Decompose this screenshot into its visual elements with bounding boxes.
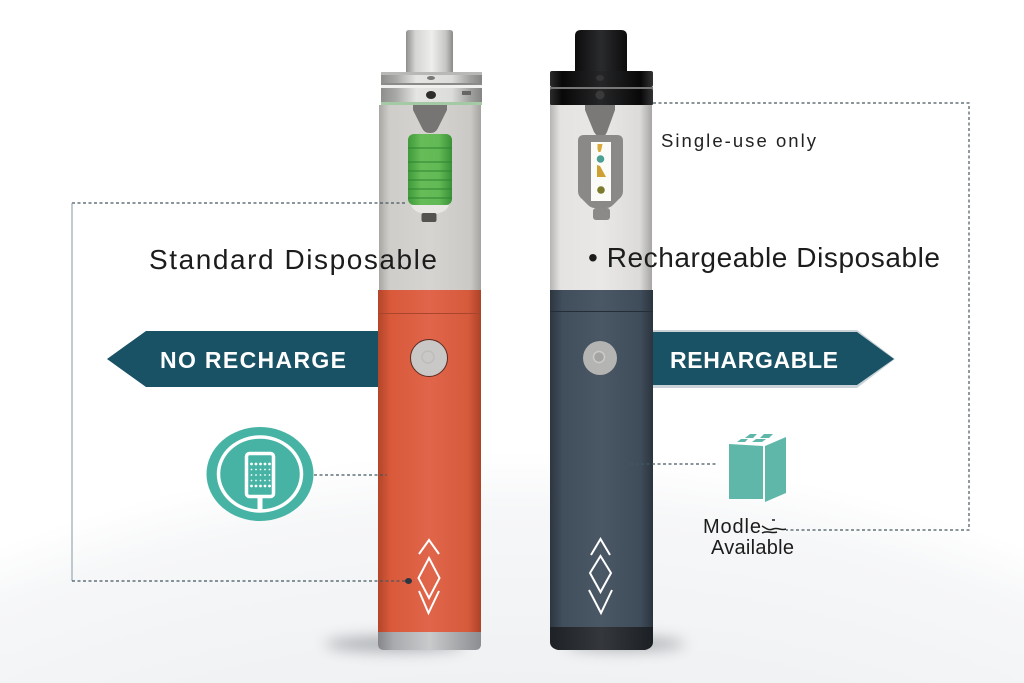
connector: icon to device (314, 474, 387, 476)
orange lower body (378, 290, 481, 634)
arrow banner: rechargeable (652, 330, 895, 388)
icon: charging circle (206, 427, 314, 521)
internal nub (593, 208, 610, 220)
light upper body (550, 105, 652, 291)
mouthpiece (406, 30, 453, 73)
right device: rechargeable disposable (550, 30, 653, 650)
navy lower body (550, 290, 653, 634)
power button (583, 341, 617, 375)
icon: model box (729, 434, 786, 502)
grey upper body (379, 105, 481, 291)
arrow banner: no recharge (107, 331, 380, 387)
internal lower cap (411, 205, 449, 214)
black collar (550, 71, 653, 105)
chevron diamond logo (418, 540, 440, 613)
clear collar (381, 72, 482, 105)
internal nub (422, 213, 436, 222)
left device: standard disposable (378, 30, 482, 650)
mouthpiece (575, 30, 627, 73)
label: models available: Modle (703, 516, 761, 538)
label: models available (703, 516, 794, 559)
chevron diamond logo (589, 539, 612, 613)
arrow banner: rechargeable: REHARGABLE (670, 347, 838, 373)
power button (410, 340, 448, 376)
heading: rechargeable disposable: • Rechargeable Disposable (588, 242, 940, 273)
silver base (378, 632, 481, 650)
connector: right bracket line (653, 103, 969, 530)
label: single-use only: Single-use only (661, 130, 817, 151)
label: models available: Available (711, 537, 794, 559)
device shadows (325, 636, 685, 652)
internal cone (585, 105, 615, 137)
internal cone (413, 105, 447, 133)
green battery (408, 134, 452, 205)
heading: standard disposable: Standard Disposable (149, 244, 437, 275)
arrow banner: no recharge: NO RECHARGE (160, 347, 346, 373)
internal window (578, 135, 623, 208)
black base (550, 627, 653, 650)
marker dot (405, 578, 412, 584)
connector: device to box (630, 463, 718, 465)
connector: left bracket line (72, 203, 408, 581)
